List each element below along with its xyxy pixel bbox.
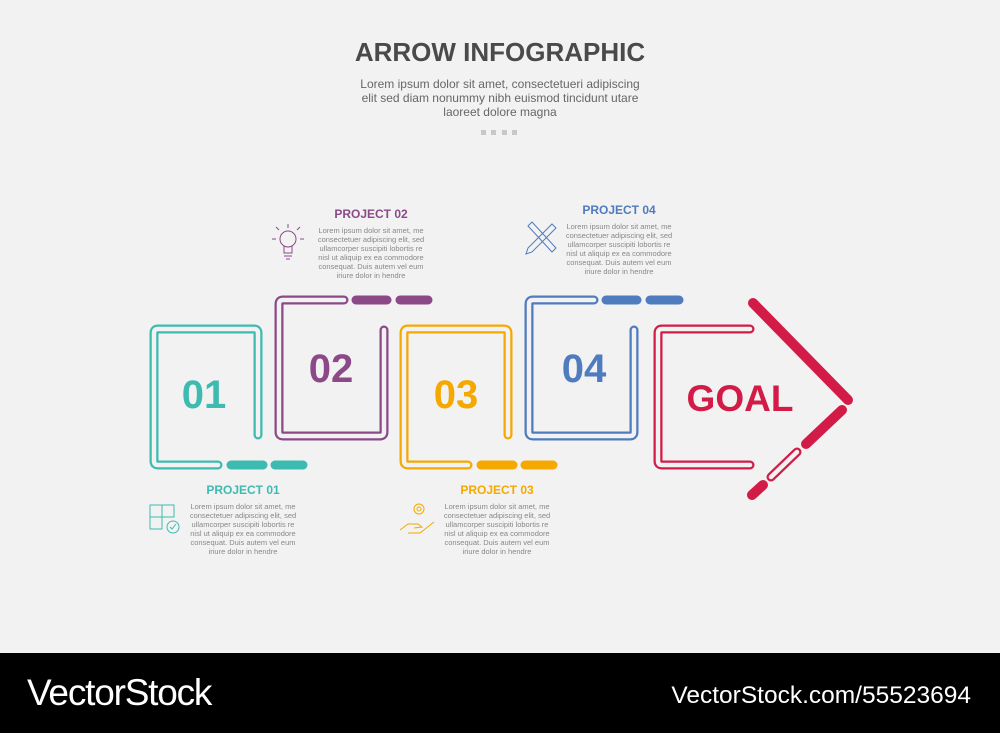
project 02 text: consequat. Duis autem vel eum (318, 262, 424, 271)
icon: pencil ruler (526, 222, 556, 254)
project 04 text: iriure dolor in hendre (585, 267, 653, 276)
project 01 text: consectetuer adipiscing elit, sed (190, 511, 296, 520)
project 04 text: Lorem ipsum dolor sit amet, me (566, 222, 672, 231)
box 02 (279, 300, 428, 436)
project 02 text (318, 207, 424, 280)
project 02 text: PROJECT 02 (334, 207, 408, 221)
dots (481, 130, 517, 135)
project 01 text (190, 483, 296, 556)
project 04 text (566, 203, 672, 276)
box 01: 01 (182, 373, 226, 417)
project 03 text: consectetuer adipiscing elit, sed (444, 511, 550, 520)
text: VectorStock.com/55523694 (671, 682, 971, 709)
project 02 text: consectetuer adipiscing elit, sed (318, 235, 424, 244)
footer (0, 653, 1000, 733)
project 01 text: Lorem ipsum dolor sit amet, me (190, 502, 296, 511)
subtitle: elit sed diam nonummy nibh euismod tincidunt utare (362, 91, 639, 105)
project 03 text: PROJECT 03 (460, 483, 534, 497)
title: ARROW INFOGRAPHIC (355, 37, 645, 67)
text: VectorStock (27, 672, 213, 713)
project 01 text: PROJECT 01 (206, 483, 280, 497)
project 02 text: nisl ut aliquip ex ea commodore (318, 253, 424, 262)
box 01 (154, 329, 303, 465)
goal arrow (658, 303, 848, 495)
icon: lightbulb (272, 224, 304, 259)
box 02: 02 (309, 347, 353, 391)
project 03 text: iriure dolor in hendre (463, 547, 531, 556)
box 04 (529, 300, 679, 436)
subtitle (360, 77, 640, 119)
project 01 text: nisl ut aliquip ex ea commodore (190, 529, 296, 538)
project 04 text: nisl ut aliquip ex ea commodore (566, 249, 672, 258)
subtitle: Lorem ipsum dolor sit amet, consectetueri adipiscing (360, 77, 640, 91)
project 04 text: ullamcorper suscipiti lobortis re (568, 240, 670, 249)
project 01 text: consequat. Duis autem vel eum (190, 538, 296, 547)
project 03 text: Lorem ipsum dolor sit amet, me (444, 502, 550, 511)
project 01 text: ullamcorper suscipiti lobortis re (192, 520, 294, 529)
subtitle: laoreet dolore magna (443, 105, 557, 119)
icon: hand gear (400, 504, 434, 533)
goal arrow: GOAL (687, 378, 793, 419)
project 04 text: consequat. Duis autem vel eum (566, 258, 672, 267)
box 04: 04 (562, 347, 607, 391)
project 02 text: iriure dolor in hendre (337, 271, 405, 280)
project 03 text (444, 483, 550, 556)
project 02 text: ullamcorper suscipiti lobortis re (320, 244, 422, 253)
box 03 (404, 329, 553, 465)
project 02 text: Lorem ipsum dolor sit amet, me (318, 226, 424, 235)
project 03 text: consequat. Duis autem vel eum (444, 538, 550, 547)
project 03 text: ullamcorper suscipiti lobortis re (446, 520, 548, 529)
project 04 text: PROJECT 04 (582, 203, 656, 217)
project 04 text: consectetuer adipiscing elit, sed (566, 231, 672, 240)
project 01 text: iriure dolor in hendre (209, 547, 277, 556)
box 03: 03 (434, 373, 478, 417)
project 03 text: nisl ut aliquip ex ea commodore (444, 529, 550, 538)
icon: puzzle (150, 505, 179, 533)
